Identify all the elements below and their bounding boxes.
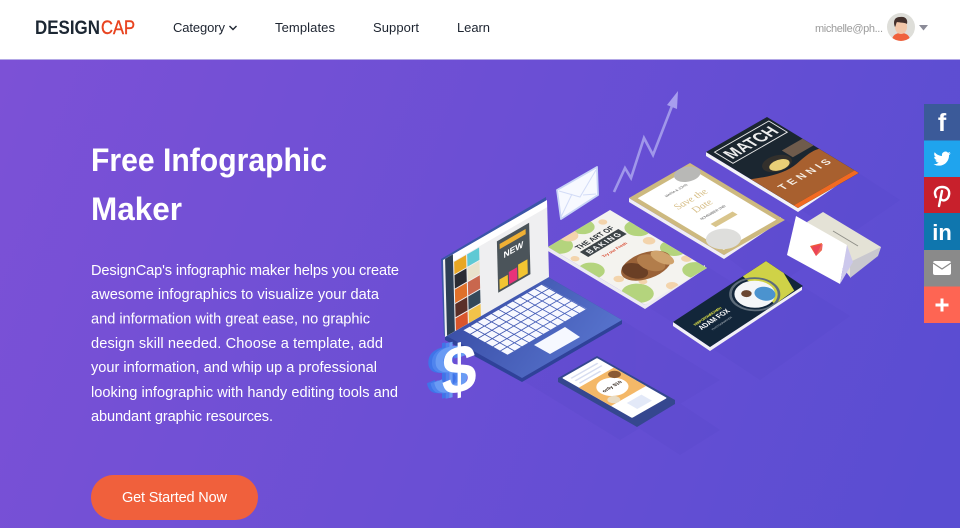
icon: dollar sign: [426, 324, 477, 414]
icon: twitter: [924, 140, 960, 177]
social share sidebar: [924, 104, 960, 323]
card: the art of baking: Try our Fresh: [601, 241, 629, 258]
description paragraph: [91, 263, 399, 425]
menu: templates: Templates: [275, 20, 336, 35]
card: match tennis poster: MATCH: [719, 124, 783, 161]
laptop screen: NEW: [503, 240, 524, 261]
description paragraph: awesome infographics to visualize your data: [91, 287, 380, 303]
description paragraph: abundant graphic resources.: [91, 409, 273, 425]
menu: support: Support: [373, 20, 419, 35]
card: save the date: [629, 163, 785, 259]
description paragraph: looking infographic with handy editing tools and: [91, 385, 398, 401]
icon: dollar sign: $: [426, 328, 461, 411]
logo: DESIGN: [35, 18, 100, 39]
illustration: isometric design mockups: [427, 91, 881, 427]
card: save the date: Save the: [671, 187, 712, 211]
icon: dropdown caret: [919, 25, 928, 30]
icon: dollar sign: $: [430, 328, 465, 412]
card: the art of baking: THE ART OF: [573, 225, 617, 251]
icon: gem logo: [810, 243, 823, 256]
icon: linkedin: in: [932, 220, 952, 245]
tablet: only $10: [601, 380, 624, 394]
trackpad: [534, 327, 580, 354]
card: the art of baking: BAKING: [584, 231, 624, 255]
icon: dollar sign: $: [433, 327, 468, 411]
tablet: [558, 356, 675, 427]
icon: more: [924, 286, 960, 323]
icon: growth arrow: [614, 91, 678, 192]
laptop base: [445, 277, 622, 382]
description paragraph: DesignCap's infographic maker helps you create: [91, 263, 399, 279]
icon: envelope: [557, 167, 598, 219]
heading: Maker: [91, 191, 182, 227]
card: match tennis poster: TENNIS: [775, 158, 835, 192]
icon: pinterest: [924, 177, 960, 213]
icon: facebook: f: [938, 109, 947, 137]
icon: linkedin: [924, 213, 960, 250]
keyboard: [467, 286, 583, 353]
heading: [91, 142, 327, 227]
logo: CAP: [101, 18, 135, 39]
user email: michelle@ph...: [815, 23, 883, 35]
navigation bar: [0, 0, 960, 60]
card: save the date: MARIA & JOHN: [664, 183, 689, 198]
card: the art of baking: [548, 210, 707, 309]
card: match tennis poster: [706, 117, 859, 212]
icon: user avatar: [887, 13, 915, 41]
soft shadows: [522, 170, 900, 455]
call to action button: Get Started Now: [122, 490, 228, 506]
business card stack: [787, 212, 881, 284]
card: save the date: NOVEMBER 2ND: [699, 204, 727, 221]
icon: email: [924, 250, 960, 286]
ticket: adam fox: PHOTOGRAPHER: [710, 316, 733, 331]
description paragraph: and information with great ease, no graphic: [91, 312, 370, 328]
icon: facebook: [924, 104, 960, 140]
laptop: [441, 197, 622, 382]
description paragraph: design skill needed. Choose a template, add: [91, 336, 383, 352]
laptop screen: [441, 197, 549, 337]
description paragraph: your information, and whip up a professional: [91, 360, 377, 376]
call to action button: [91, 475, 258, 520]
icon: dollar sign: $: [442, 327, 477, 411]
menu: category: Category: [173, 20, 226, 35]
card: save the date: Date: [687, 198, 717, 215]
menu: learn: Learn: [457, 20, 490, 35]
ticket: adam fox: [673, 261, 803, 351]
heading: Free Infographic: [91, 142, 327, 178]
ticket: adam fox: KEEP GROWING WITH: [692, 306, 723, 326]
ticket: adam fox: ADAM FOX: [696, 307, 733, 331]
